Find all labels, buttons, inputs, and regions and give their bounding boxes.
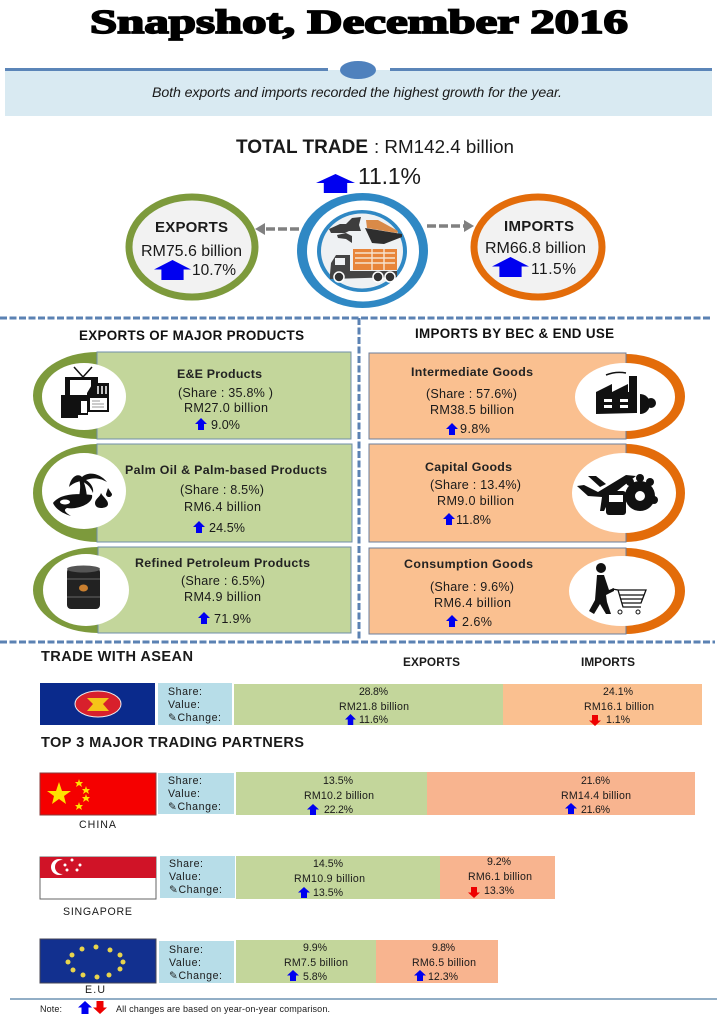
flag: Singapore xyxy=(40,857,156,899)
imports circle: IMPORTS xyxy=(504,218,574,235)
card: refined petroleum: (Share : 6.5%) xyxy=(181,574,265,588)
imports bar: RM6.1 billion xyxy=(468,871,532,883)
card: palm oil: Palm Oil & Palm-based Products xyxy=(125,463,327,477)
imports bar xyxy=(503,684,702,726)
card: capital goods: RM9.0 billion xyxy=(437,494,514,508)
card: intermediate goods: RM38.5 billion xyxy=(430,403,514,417)
arrow: to exports xyxy=(255,223,299,235)
card: consumption goods: Consumption Goods xyxy=(404,557,533,571)
card: E&E products: 9.0% xyxy=(211,418,240,432)
icon: shopper with cart xyxy=(589,563,646,614)
row labels: Share: xyxy=(168,686,202,698)
imports bar: 21.6% xyxy=(581,775,611,787)
row labels xyxy=(158,773,234,814)
card: capital goods xyxy=(369,444,685,542)
flag: ASEAN xyxy=(40,683,155,725)
card: intermediate goods: 9.8% xyxy=(460,422,490,436)
footnote: All changes are based on year-on-year comparison. xyxy=(116,1004,330,1014)
imports bar xyxy=(376,940,498,983)
exports bar xyxy=(236,772,427,816)
card: refined petroleum: Refined Petroleum Products xyxy=(135,556,310,570)
card: E&E products: E&E Products xyxy=(177,367,262,381)
card: consumption goods: RM6.4 billion xyxy=(434,596,511,610)
row labels xyxy=(158,683,232,725)
icon: plane, bus and gear xyxy=(577,474,658,515)
row labels: Value: xyxy=(168,699,200,711)
card: refined petroleum xyxy=(33,547,351,633)
total trade heading: : RM142.4 billion xyxy=(374,136,514,157)
imports bar xyxy=(440,856,555,899)
row labels: Share: xyxy=(169,858,203,870)
footnote xyxy=(40,1001,330,1014)
exports circle: EXPORTS xyxy=(155,219,228,236)
card: consumption goods: 2.6% xyxy=(462,615,492,629)
card: palm oil xyxy=(33,444,352,542)
card: intermediate goods: Intermediate Goods xyxy=(411,365,533,379)
exports circle: RM75.6 billion xyxy=(141,243,242,260)
exports bar: 9.9% xyxy=(303,942,328,954)
heading: top 3 major trading partners: TOP 3 MAJOR TRADING PARTNERS xyxy=(41,735,304,751)
imports bar: 13.3% xyxy=(484,885,515,897)
icon: truck xyxy=(330,249,397,282)
card: capital goods: (Share : 13.4%) xyxy=(430,478,521,492)
card: capital goods: 11.8% xyxy=(456,513,491,527)
card: E&E products xyxy=(33,352,351,439)
card: consumption goods: (Share : 9.6%) xyxy=(430,580,514,594)
card: refined petroleum: 71.9% xyxy=(214,612,251,626)
panel: exports of major products xyxy=(33,328,352,633)
row labels: ✎Change: xyxy=(168,712,221,724)
imports bar xyxy=(427,772,695,816)
row labels: ✎Change: xyxy=(168,801,221,813)
icon: plane xyxy=(329,217,361,243)
column heading: exports: EXPORTS xyxy=(403,655,460,669)
icon: oil barrel xyxy=(67,566,100,609)
column heading: imports: IMPORTS xyxy=(581,655,635,669)
exports heading: EXPORTS OF MAJOR PRODUCTS xyxy=(79,328,304,343)
imports bar: 21.6% xyxy=(581,804,611,816)
total trade heading: TOTAL TRADE xyxy=(236,137,368,158)
card: E&E products: RM27.0 billion xyxy=(184,401,268,415)
flag: China xyxy=(40,773,156,815)
row labels: Value: xyxy=(169,871,201,883)
imports bar: RM14.4 billion xyxy=(561,790,631,802)
exports circle: 10.7% xyxy=(192,262,236,279)
row labels xyxy=(160,856,235,898)
card: E&E products: (Share : 35.8% ) xyxy=(178,386,273,400)
exports circle xyxy=(129,197,255,297)
exports bar: 11.6% xyxy=(359,714,389,726)
imports bar: 9.2% xyxy=(487,856,512,868)
country label: CHINA xyxy=(79,819,117,831)
icon: palm oil xyxy=(53,474,112,516)
row: E.U xyxy=(40,939,498,996)
exports bar xyxy=(236,856,440,899)
card: palm oil: (Share : 8.5%) xyxy=(180,483,264,497)
card: intermediate goods: (Share : 57.6%) xyxy=(426,387,517,401)
exports bar: 28.8% xyxy=(359,686,389,698)
card: palm oil: RM6.4 billion xyxy=(184,500,261,514)
exports bar: RM10.9 billion xyxy=(294,873,365,885)
exports bar: 5.8% xyxy=(303,971,328,983)
central trade icon xyxy=(297,193,428,308)
heading: trade with ASEAN: TRADE WITH ASEAN xyxy=(41,649,193,665)
exports bar: 22.2% xyxy=(324,804,354,816)
total trade change: 11.1% xyxy=(358,163,421,189)
imports circle xyxy=(474,197,602,297)
row labels: Value: xyxy=(169,957,201,969)
arrow: to imports xyxy=(427,220,474,232)
row labels: ✎Change: xyxy=(169,884,222,896)
card: intermediate goods xyxy=(369,353,685,439)
row labels xyxy=(159,941,234,983)
exports bar: RM21.8 billion xyxy=(339,701,409,713)
country label: E.U xyxy=(85,984,105,996)
imports bar: RM16.1 billion xyxy=(584,701,654,713)
row labels: Share: xyxy=(169,944,203,956)
footnote: Note: xyxy=(40,1004,62,1014)
summary banner xyxy=(5,61,712,116)
imports circle: 11.5% xyxy=(531,261,576,278)
imports bar: 12.3% xyxy=(428,971,459,983)
exports bar xyxy=(236,940,376,983)
icon: factory xyxy=(596,372,656,414)
exports bar xyxy=(234,684,503,726)
card: refined petroleum: RM4.9 billion xyxy=(184,590,261,604)
icon: electronics xyxy=(61,367,109,418)
exports bar: 14.5% xyxy=(313,858,344,870)
exports bar: 13.5% xyxy=(323,775,354,787)
row labels: ✎Change: xyxy=(169,970,222,982)
card: capital goods: Capital Goods xyxy=(425,460,512,474)
card: consumption goods xyxy=(369,548,685,634)
country label: SINGAPORE xyxy=(63,906,132,918)
flag: European Union xyxy=(40,939,156,983)
imports heading: IMPORTS BY BEC & END USE xyxy=(415,326,614,341)
banner text: Both exports and imports recorded the highest growth for the year. xyxy=(152,85,562,101)
row: ASEAN xyxy=(40,683,702,726)
imports bar: 1.1% xyxy=(606,714,631,726)
imports circle: RM66.8 billion xyxy=(485,240,586,257)
row: Singapore xyxy=(40,856,555,918)
row: China xyxy=(40,772,695,831)
exports bar: RM7.5 billion xyxy=(284,957,348,969)
card: palm oil: 24.5% xyxy=(209,521,245,535)
imports bar: 9.8% xyxy=(432,942,456,954)
total trade change xyxy=(316,163,421,193)
row labels: Share: xyxy=(168,775,202,787)
exports bar: RM10.2 billion xyxy=(304,790,374,802)
total trade heading xyxy=(236,136,514,158)
panel: imports by BEC and end use xyxy=(369,326,685,634)
icon: ship xyxy=(365,228,402,244)
title: Snapshot, December 2016 xyxy=(90,4,628,41)
imports bar: 24.1% xyxy=(603,686,634,698)
imports bar: RM6.5 billion xyxy=(412,957,476,969)
exports bar: 13.5% xyxy=(313,887,344,899)
row labels: Value: xyxy=(168,788,200,800)
